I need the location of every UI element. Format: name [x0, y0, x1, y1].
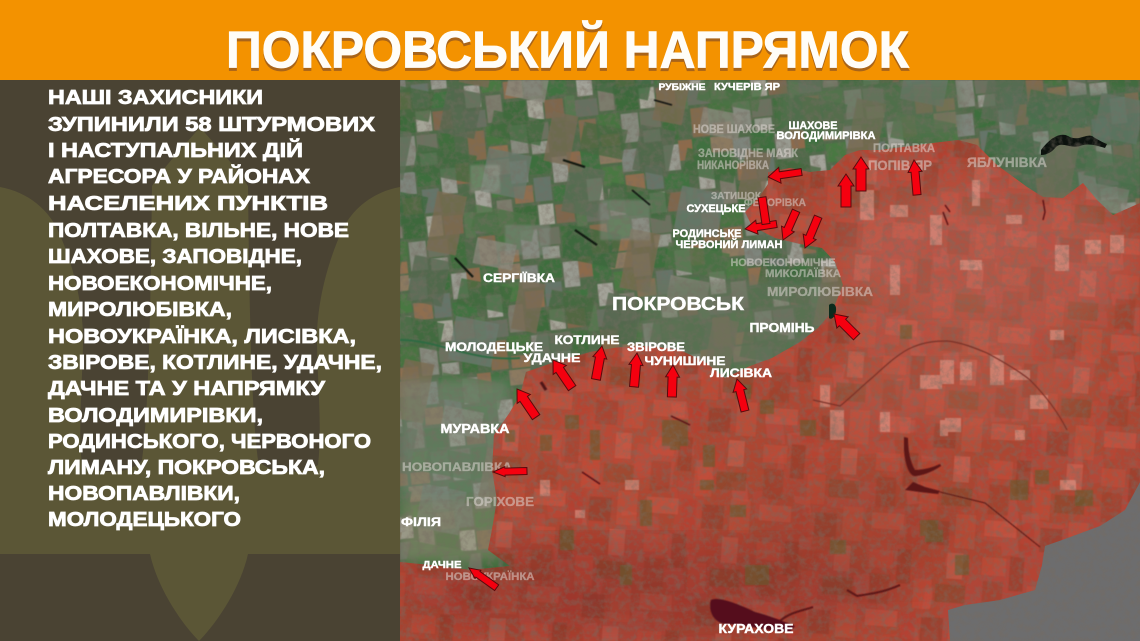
labels: highlighted settlements: СЕРГІЇВКА — [483, 270, 555, 285]
labels: highlighted settlements: ФІЛІЯ — [401, 515, 441, 529]
labels: faded settlements: МИРОЛЮБІВКА — [767, 284, 874, 299]
map panel — [380, 80, 1140, 641]
map labels — [401, 81, 1047, 636]
text block: summary: ЗВІРОВЕ, КОТЛИНЕ, УДАЧНЕ, — [48, 352, 382, 374]
water: Promin pond — [829, 304, 836, 319]
text block: summary: МИРОЛЮБІВКА, — [48, 299, 232, 321]
text block: summary: ШАХОВЕ, ЗАПОВІДНЕ, — [48, 246, 302, 268]
text block: summary: ПОЛТАВКА, ВІЛЬНЕ, НОВЕ — [48, 220, 349, 242]
labels: highlighted settlements: СУХЕЦЬКЕ — [686, 203, 746, 215]
text block: summary: АГРЕСОРА У РАЙОНАХ — [48, 164, 311, 188]
labels: faded settlements: ПОПІВ ЯР — [868, 157, 932, 173]
labels: highlighted settlements: ЛИСІВКА — [710, 366, 772, 380]
icon: trident emblem watermark — [0, 80, 400, 641]
labels: highlighted settlements: КУРАХОВЕ — [718, 622, 794, 636]
labels: faded settlements: ЗАПОВІДНЕ МАЯК — [698, 148, 799, 160]
texture — [400, 80, 1140, 641]
labels: faded settlements: ГОРІХОВЕ — [466, 494, 534, 509]
labels: faded settlements: НОВОЕКОНОМІЧНЕ — [730, 257, 836, 269]
text block: summary: РОДИНСЬКОГО, ЧЕРВОНОГО — [48, 431, 371, 453]
labels: highlighted settlements: КУЧЕРІВ ЯР — [714, 81, 780, 93]
satellite base fields — [400, 80, 1140, 641]
labels: highlighted settlements — [401, 81, 876, 636]
labels: highlighted settlements: ПРОМІНЬ — [750, 321, 815, 335]
red-zone field patches — [400, 140, 1140, 641]
labels: highlighted settlements: УДАЧНЕ — [524, 351, 580, 365]
text block: summary: І НАСТУПАЛЬНИХ ДІЙ — [48, 138, 303, 162]
labels: highlighted settlements: КОТЛИНЕ — [554, 333, 620, 347]
labels: faded settlements: МИКОЛАЇВКА — [765, 267, 841, 280]
labels: faded settlements: НОВЕ ШАХОВЕ — [693, 124, 775, 136]
text block: summary: ДАЧНЕ ТА У НАПРЯМКУ — [48, 378, 326, 400]
labels: faded settlements: ФЕДОРІВКА — [744, 197, 806, 209]
labels: highlighted settlements: МУРАВКА — [440, 422, 510, 436]
labels: highlighted settlements: РОДИНСЬКЕ — [672, 228, 742, 240]
water: dark pond north-east — [1041, 135, 1107, 155]
labels: highlighted settlements: ЗВІРОВЕ — [627, 340, 685, 354]
text block: summary: НАСЕЛЕНИХ ПУНКТІВ — [48, 193, 328, 215]
text block: summary — [48, 87, 382, 531]
text block: summary: ЗУПИНИЛИ 58 ШТУРМОВИХ — [48, 114, 376, 136]
labels: highlighted settlements: РУБІЖНЕ — [658, 82, 706, 93]
arrows: enemy assault directions — [466, 157, 924, 592]
text block: summary: НОВОУКРАЇНКА, ЛИСІВКА, — [48, 325, 356, 348]
text block: summary: НАШІ ЗАХИСНИКИ — [48, 87, 263, 109]
water and roads in red zone — [400, 100, 1067, 632]
labels: highlighted settlements: ДАЧНЕ — [422, 559, 462, 571]
labels: faded settlements: ЯБЛУНІВКА — [967, 154, 1047, 170]
text block: summary: ЛИМАНУ, ПОКРОВСЬКА, — [48, 457, 325, 479]
labels: faded settlements: ПОЛТАВКА — [873, 143, 935, 155]
labels: highlighted settlements: ВОЛОДИМИРІВКА — [776, 130, 876, 142]
area: grey city south-east — [948, 482, 1140, 641]
panel: left text panel — [0, 80, 400, 641]
labels: faded settlements: НИКАНОРІВКА — [697, 160, 769, 172]
title bar — [0, 0, 1140, 82]
title: ПОКРОВСЬКИЙ НАПРЯМОК — [226, 20, 909, 80]
labels: highlighted settlements: ЧЕРВОНИЙ ЛИМАН — [676, 238, 783, 251]
labels: highlighted settlements: ЧУНИШИНЕ — [644, 354, 726, 368]
labels: faded settlements — [402, 124, 1047, 583]
labels: faded settlements: ЗАТИШОК — [711, 191, 762, 202]
text block: summary: МОЛОДЕЦЬКОГО — [48, 509, 241, 531]
labels: highlighted settlements: МОЛОДЕЦЬКЕ — [445, 340, 543, 354]
area: occupied territory (red overlay) — [400, 140, 1140, 641]
title shadow: ПОКРОВСЬКИЙ НАПРЯМОК — [226, 24, 909, 82]
text block: summary: НОВОЕКОНОМІЧНЕ, — [48, 273, 272, 295]
text block: summary: НОВОПАВЛІВКИ, — [48, 483, 240, 505]
labels: highlighted settlements: ШАХОВЕ — [788, 120, 838, 132]
text block: summary: ВОЛОДИМИРІВКИ, — [48, 405, 263, 427]
labels: highlighted settlements: ПОКРОВСЬК — [612, 294, 745, 314]
labels: faded settlements: НОВОУКРАЇНКА — [446, 570, 535, 583]
labels: faded settlements: НОВОПАВЛІВКА — [402, 460, 512, 474]
